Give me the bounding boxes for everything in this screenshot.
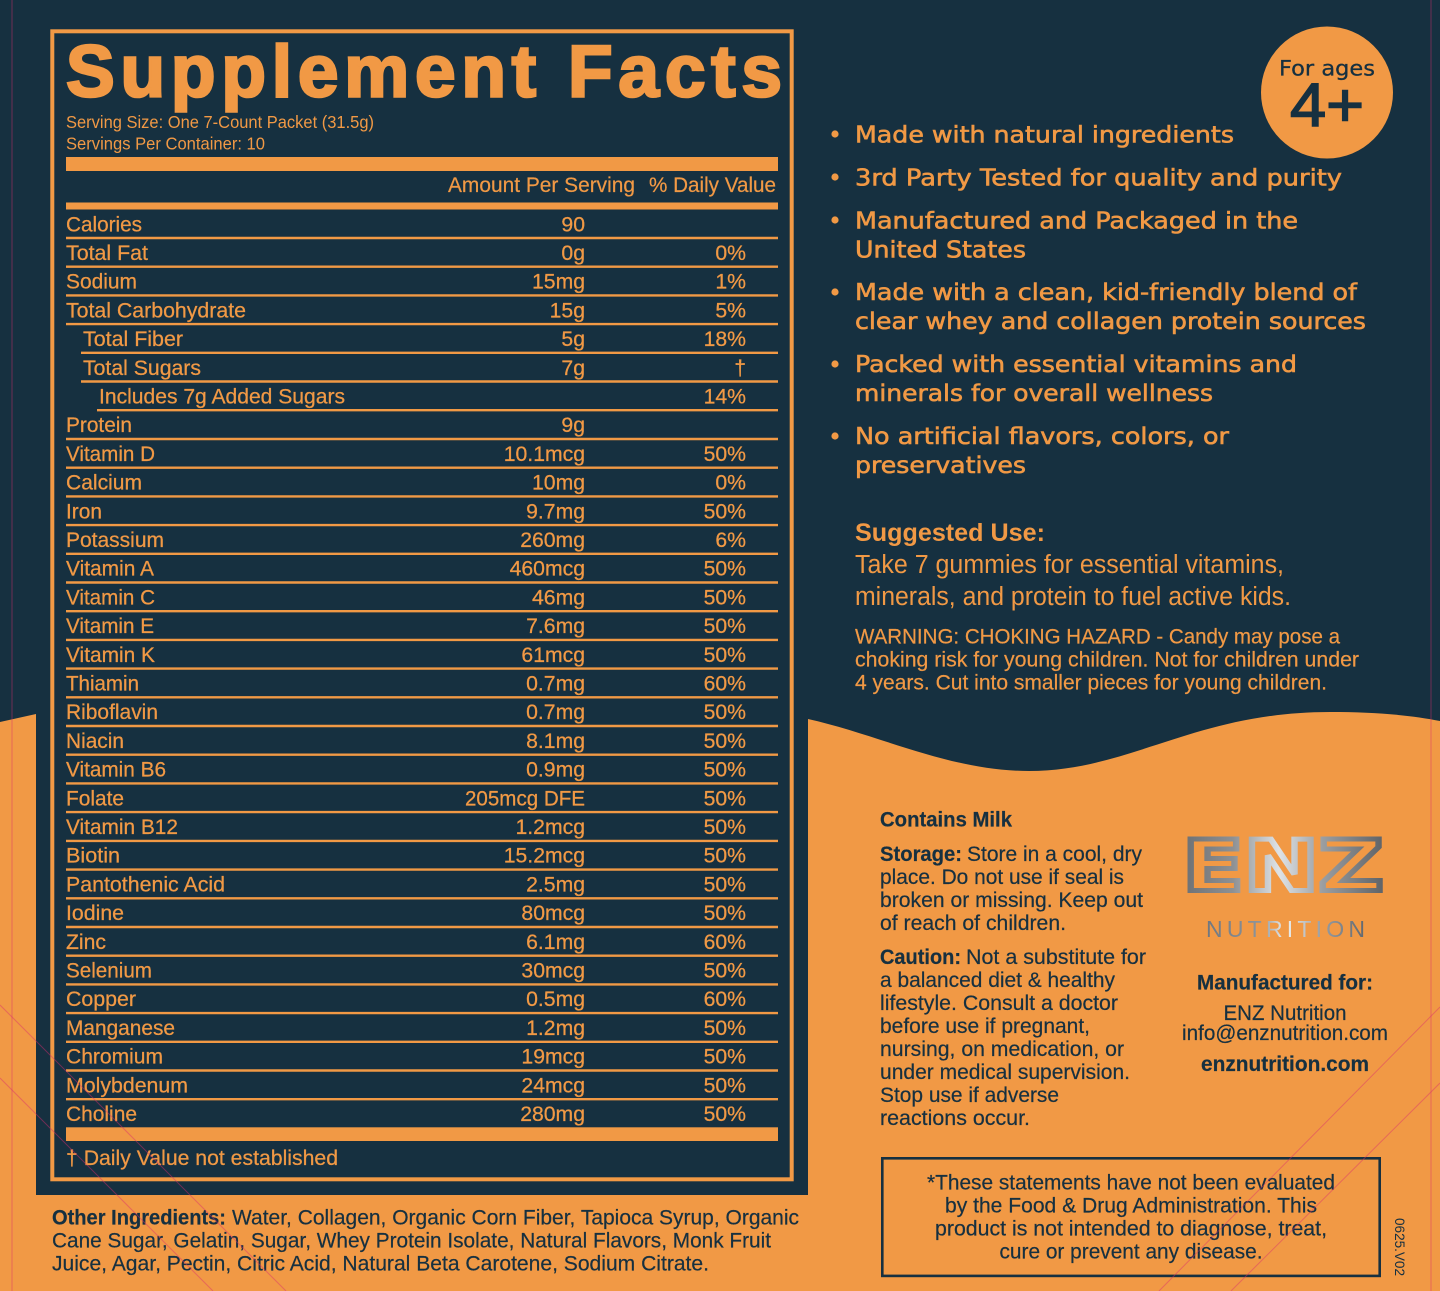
row: Manganese: 50% — [704, 1017, 746, 1040]
row: Total Carbohydrate: 15g — [550, 299, 585, 322]
row: Copper: 0.5mg — [526, 988, 585, 1011]
row: Vitamin B6: 50% — [704, 759, 746, 782]
caution: lifestyle. Consult a doctor — [880, 992, 1118, 1015]
row: Potassium: 6% — [715, 529, 746, 552]
row: Total Sugars: Total Sugars — [83, 357, 201, 380]
warning text: choking risk for young children. Not for children under — [855, 648, 1359, 671]
row: Vitamin B6: 0.9mg — [526, 759, 585, 782]
row: Vitamin C: Vitamin C — [66, 586, 155, 609]
row: Choline: 280mg — [520, 1103, 585, 1126]
row: Total Fat — [66, 242, 778, 267]
row: Chromium: Chromium — [66, 1046, 163, 1069]
row: Calories — [66, 213, 778, 238]
row: Total Fiber — [81, 328, 778, 353]
row: Zinc: 60% — [704, 931, 746, 954]
row: Iron: 9.7mg — [526, 500, 585, 523]
caution: reactions occur. — [880, 1107, 1030, 1130]
row: Total Fat: Total Fat — [66, 242, 148, 265]
row: Chromium — [66, 1046, 778, 1070]
row: Iron: 50% — [704, 500, 746, 523]
badge: for ages 4+: 4+ — [1290, 71, 1364, 139]
row: Vitamin B12: 50% — [704, 816, 746, 839]
row: Iodine: Iodine — [66, 902, 124, 925]
contains milk: Contains Milk — [880, 808, 1012, 831]
row: Zinc — [66, 931, 778, 956]
row: Vitamin B6 — [66, 759, 778, 783]
row: Total Fat: 0% — [715, 242, 746, 265]
header bar — [66, 202, 778, 210]
footnote: † Daily Value not established — [66, 1147, 338, 1170]
row: Calories: Calories — [66, 213, 142, 236]
row: Vitamin K: 50% — [704, 644, 746, 667]
row: Copper: 60% — [704, 988, 746, 1011]
row: Choline: Choline — [66, 1103, 137, 1126]
row: Vitamin E — [66, 615, 778, 640]
FDA disclaimer box: cure or prevent any disease. — [1000, 1240, 1262, 1263]
row: Copper: Copper — [66, 988, 136, 1011]
row: Folate: Folate — [66, 787, 124, 810]
serving information: Serving Size: One 7-Count Packet (31.5g) — [66, 112, 374, 132]
row: Vitamin K: Vitamin K — [66, 644, 155, 667]
bullet: vitamins and minerals: Packed with essential vitamins and — [855, 352, 1297, 378]
row: Iodine: 80mcg — [521, 902, 585, 925]
background: orange wave — [0, 712, 1440, 1291]
row: Thiamin: 0.7mg — [526, 672, 585, 696]
row: Iodine: 50% — [704, 902, 746, 925]
row: Niacin: 8.1mg — [526, 730, 585, 753]
warning text: WARNING: CHOKING HAZARD - Candy may pose a — [855, 625, 1340, 648]
row: Vitamin D: Vitamin D — [66, 443, 155, 466]
row: Copper — [66, 988, 778, 1013]
row: Total Fiber: 18% — [704, 328, 746, 351]
other ingredients: Cane Sugar, Gelatin, Sugar, Whey Protein Isolate, Natural Flavors, Monk Fruit — [52, 1230, 771, 1253]
manufacturer information — [1182, 972, 1388, 1076]
storage: place. Do not use if seal is — [880, 866, 1124, 889]
row: Riboflavin — [66, 701, 778, 726]
row: Vitamin E: 7.6mg — [526, 615, 585, 638]
row: Total Sugars — [81, 357, 778, 382]
row: Folate: 205mcg DFE — [465, 787, 585, 810]
row: Folate — [66, 787, 778, 812]
version code: 0625.V02 — [1392, 1218, 1407, 1276]
row: Vitamin A: Vitamin A — [66, 558, 155, 581]
row: Potassium: Potassium — [66, 529, 164, 552]
row: Vitamin E: Vitamin E — [66, 615, 154, 638]
panel: supplement facts — [52, 31, 792, 1179]
row: Calcium: 0% — [715, 472, 746, 495]
other ingredients: Juice, Agar, Pectin, Citric Acid, Natural Beta Carotene, Sodium Citrate. — [52, 1253, 709, 1276]
row: Total Sugars: † — [734, 357, 746, 380]
row: Protein — [66, 414, 778, 439]
row: Iodine — [66, 902, 778, 927]
row: Vitamin C: 50% — [704, 586, 746, 609]
top thick bar — [66, 157, 778, 171]
row: Total Fat: 0g — [561, 242, 585, 265]
row: Selenium: 30mcg — [521, 960, 585, 982]
badge: for ages 4+: For ages — [1279, 56, 1375, 80]
caution: under medical supervision. — [880, 1061, 1130, 1084]
row: Choline: 50% — [704, 1103, 746, 1126]
row: Riboflavin: Riboflavin — [66, 701, 158, 724]
row: Sodium — [66, 271, 778, 295]
row: Vitamin K: 61mcg — [521, 644, 585, 667]
suggested use: Suggested Use: — [855, 519, 1045, 547]
row: Vitamin B12: Vitamin B12 — [66, 816, 178, 839]
row: Vitamin K — [66, 644, 778, 669]
row: Vitamin C — [66, 586, 778, 611]
row: Vitamin A: 50% — [704, 558, 746, 581]
row: Molybdenum: 50% — [704, 1074, 746, 1097]
row: Pantothenic Acid: Pantothenic Acid — [66, 873, 225, 896]
FDA disclaimer box — [882, 1158, 1380, 1276]
bullet: clean blend — [831, 280, 1366, 335]
caution: Caution: — [880, 946, 961, 969]
logo: ENZ Nutrition: NUTRITION — [1206, 916, 1365, 942]
bullet: third party tested: 3rd Party Tested for quality and purity — [855, 166, 1342, 192]
warning text — [855, 625, 1359, 694]
warning text: 4 years. Cut into smaller pieces for young children. — [855, 671, 1327, 694]
row: Vitamin D: 10.1mcg — [504, 443, 585, 466]
row: Calcium: Calcium — [66, 472, 142, 495]
row: Chromium: 50% — [704, 1046, 746, 1069]
row: Calcium: 10mg — [532, 472, 585, 495]
row: Vitamin D — [66, 443, 778, 468]
row: Biotin — [66, 845, 778, 870]
row: Selenium: 50% — [704, 960, 746, 982]
FDA disclaimer box: product is not intended to diagnose, treat, — [935, 1217, 1327, 1240]
caution: a balanced diet & healthy — [880, 969, 1116, 992]
row: Calcium — [66, 472, 778, 496]
bullet: vitamins and minerals — [831, 352, 1297, 407]
row: Includes Added Sugars — [97, 386, 778, 410]
storage: broken or missing. Keep out — [880, 889, 1143, 912]
storage: of reach of children. — [880, 912, 1066, 935]
row: Potassium — [66, 529, 778, 554]
row: Niacin: 50% — [704, 730, 746, 753]
caution: Stop use if adverse — [880, 1084, 1059, 1107]
bullet: natural ingredients: Made with natural ingredients — [855, 122, 1234, 148]
row: Thiamin: 60% — [704, 672, 746, 696]
row: Total Carbohydrate — [66, 299, 778, 324]
row: Biotin: Biotin — [66, 845, 120, 868]
other ingredients: Water, Collagen, Organic Corn Fiber, Tapioca Syrup, Organic — [232, 1207, 799, 1230]
row: Manganese: 1.2mg — [526, 1017, 585, 1040]
manufacturer information: enznutrition.com — [1201, 1053, 1369, 1076]
row: Manganese: Manganese — [66, 1017, 175, 1040]
row: Calories: 90 — [561, 213, 585, 236]
row: Iron: Iron — [66, 500, 102, 523]
row: Selenium — [66, 960, 778, 984]
manufacturer information: ENZ Nutrition — [1224, 1002, 1346, 1025]
serving information: Servings Per Container: 10 — [66, 134, 265, 154]
bullet: manufactured in United States: United States — [855, 238, 1026, 264]
logo: ENZ Nutrition: ENZ — [1182, 825, 1384, 907]
bullet: no artificial — [831, 424, 1230, 479]
row: Includes Added Sugars: 14% — [704, 386, 746, 408]
bottom thick bar — [66, 1127, 778, 1141]
FDA disclaimer box: by the Food & Drug Administration. This — [945, 1194, 1317, 1217]
row: Riboflavin: 50% — [704, 701, 746, 724]
row: Manganese — [66, 1017, 778, 1042]
bullet: clean blend: Made with a clean, kid-friendly blend of — [855, 280, 1358, 306]
other ingredients: Other Ingredients: — [52, 1207, 226, 1230]
row: Biotin: 50% — [704, 845, 746, 868]
suggested use: minerals, and protein to fuel active kids. — [855, 583, 1291, 611]
row: Choline — [66, 1103, 746, 1126]
row: Chromium: 19mcg — [521, 1046, 585, 1069]
row: Riboflavin: 0.7mg — [526, 701, 585, 724]
bullet: manufactured in United States: Manufactured and Packaged in the — [855, 208, 1298, 234]
other ingredients — [52, 1207, 799, 1276]
row: Total Fiber: 5g — [561, 328, 585, 351]
badge: for ages 4+ — [1261, 26, 1393, 158]
storage: Store in a cool, dry — [967, 843, 1143, 866]
caution: before use if pregnant, — [880, 1015, 1090, 1038]
row: Pantothenic Acid: 50% — [704, 873, 746, 896]
title: Supplement Facts — [66, 32, 782, 112]
row: Total Sugars: 7g — [561, 357, 585, 380]
row: Total Carbohydrate: 5% — [715, 299, 746, 322]
row: Folate: 50% — [704, 787, 746, 810]
suggested use — [855, 519, 1291, 611]
row: Biotin: 15.2mcg — [504, 845, 585, 868]
caution: Not a substitute for — [966, 946, 1146, 969]
row: Sodium: 1% — [715, 271, 746, 294]
row: Zinc: 6.1mg — [526, 931, 585, 954]
column headers: % Daily Value — [649, 174, 776, 197]
row: Protein: 9g — [561, 414, 585, 437]
row: Vitamin C: 46mg — [532, 586, 585, 609]
benefits bullet list — [831, 122, 1366, 479]
caution: nursing, on medication, or — [880, 1038, 1124, 1061]
row: Molybdenum — [66, 1074, 778, 1099]
row: Potassium: 260mg — [520, 529, 585, 552]
storage and caution text — [880, 808, 1146, 1130]
row: Zinc: Zinc — [66, 931, 106, 954]
row: Vitamin A: 460mcg — [510, 558, 585, 581]
manufacturer information: info@enznutrition.com — [1182, 1022, 1388, 1045]
row: Vitamin E: 50% — [704, 615, 746, 638]
row: Total Carbohydrate: Total Carbohydrate — [66, 299, 246, 322]
row: Vitamin B12 — [66, 816, 778, 841]
row: Iron — [66, 500, 778, 525]
row: Molybdenum: Molybdenum — [66, 1074, 188, 1097]
row: Niacin: Niacin — [66, 730, 124, 753]
row: Pantothenic Acid — [66, 873, 778, 898]
row: Thiamin: Thiamin — [66, 672, 139, 696]
storage — [880, 843, 1143, 935]
facts border — [52, 31, 792, 1179]
suggested use: Take 7 gummies for essential vitamins, — [855, 551, 1284, 579]
bullet: no artificial: No artificial flavors, colors, or — [855, 424, 1230, 450]
manufacturer information: Manufactured for: — [1197, 972, 1373, 995]
serving information — [66, 112, 374, 154]
FDA disclaimer box: *These statements have not been evaluated — [927, 1171, 1335, 1194]
bullet: no artificial: preservatives — [855, 453, 1026, 479]
row: Niacin — [66, 730, 778, 755]
bullet: vitamins and minerals: minerals for overall wellness — [855, 381, 1213, 407]
row: Molybdenum: 24mcg — [521, 1074, 585, 1097]
caution — [880, 946, 1146, 1130]
bullet: clean blend: clear whey and collagen protein sources — [855, 309, 1366, 335]
row: Vitamin D: 50% — [704, 443, 746, 466]
row: Sodium: Sodium — [66, 271, 137, 294]
row: Total Fiber: Total Fiber — [83, 328, 183, 351]
row: Vitamin A — [66, 558, 778, 582]
row: Thiamin — [66, 672, 778, 697]
row: Protein: Protein — [66, 414, 132, 437]
bullet: manufactured in United States — [831, 208, 1298, 264]
row: Includes Added Sugars: Includes 7g Added Sugars — [99, 386, 345, 408]
row: Vitamin B12: 1.2mcg — [516, 816, 585, 839]
storage: Storage: — [880, 843, 962, 866]
column headers: Amount Per Serving — [448, 174, 635, 197]
row: Vitamin B6: Vitamin B6 — [66, 759, 166, 782]
column headers — [448, 174, 776, 197]
row: Selenium: Selenium — [66, 960, 152, 982]
row: Sodium: 15mg — [532, 271, 585, 294]
row: Pantothenic Acid: 2.5mg — [526, 873, 585, 896]
